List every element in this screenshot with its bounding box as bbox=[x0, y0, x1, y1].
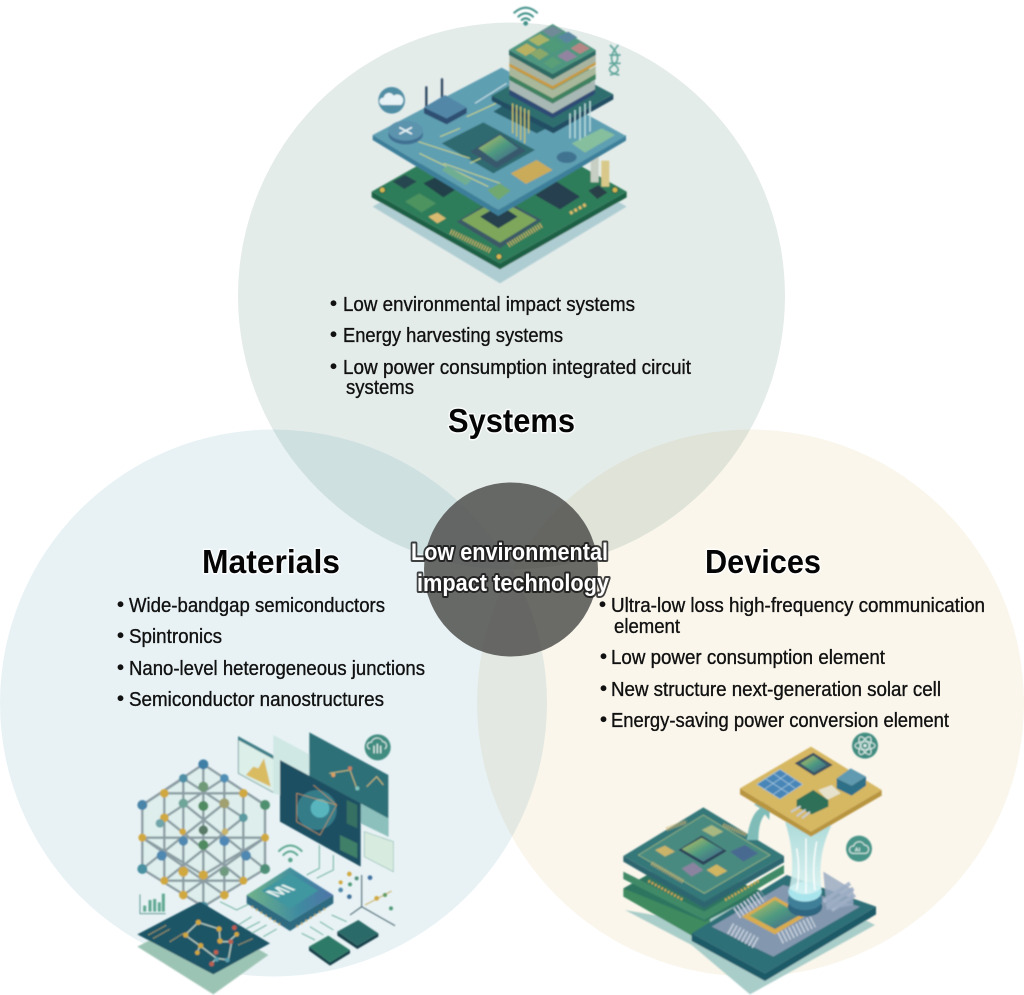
light column bbox=[785, 822, 832, 917]
bullet list: systems: Energy harvesting systems bbox=[343, 325, 563, 347]
heading: devices: Devices bbox=[705, 543, 821, 580]
bullet list: devices: • bbox=[600, 678, 607, 700]
bullet list: materials: • bbox=[117, 625, 124, 647]
bullet list: devices: Ultra-low loss high-frequency communication bbox=[611, 595, 985, 617]
bullet list: materials: Semiconductor nanostructures bbox=[129, 689, 384, 711]
scatter plot bbox=[338, 872, 395, 926]
chip stack bbox=[492, 24, 613, 143]
lattice nodes bbox=[137, 759, 270, 912]
center label: Low environmental bbox=[411, 539, 608, 566]
router bbox=[388, 79, 467, 144]
bullet list: systems: • bbox=[330, 356, 337, 378]
bullet list: systems: Low power consumption integrated circuit bbox=[343, 357, 691, 379]
circle: devices bbox=[477, 430, 1024, 976]
bullet list: systems: Low environmental impact systems bbox=[343, 294, 635, 316]
illustration: devices stacked chips and gold board bbox=[623, 733, 882, 994]
illustration: systems layered circuit boards bbox=[372, 8, 627, 283]
chip: MI bbox=[247, 867, 333, 931]
bullet list: devices: • bbox=[600, 709, 607, 731]
icon: AI cloud: AI bbox=[855, 847, 861, 853]
bullet list: materials: • bbox=[117, 594, 124, 616]
center label: impact technology bbox=[417, 570, 610, 597]
board shadow bbox=[373, 133, 627, 283]
curved arrow bbox=[747, 799, 770, 840]
green circuit board bbox=[372, 120, 627, 269]
glass plate bbox=[373, 68, 626, 216]
illustration: materials lattice and MI chip bbox=[137, 732, 395, 994]
base board with heat sink bbox=[692, 872, 876, 981]
bullet list: materials: Wide-bandgap semiconductors bbox=[129, 595, 385, 617]
bullet list: devices: Low power consumption element bbox=[611, 647, 885, 669]
bullet list: systems: • bbox=[330, 324, 337, 346]
bullet list: systems: • bbox=[330, 293, 337, 315]
bullet list: systems: systems bbox=[346, 377, 414, 399]
connector lines bbox=[220, 845, 347, 940]
bullet list: materials: Nano-level heterogeneous junctions bbox=[129, 658, 425, 680]
bullet list: devices: • bbox=[600, 646, 607, 668]
left layered boards bbox=[623, 807, 784, 936]
gold board bbox=[740, 747, 882, 837]
bullet list: materials bbox=[117, 594, 425, 711]
section: devices list bbox=[599, 543, 985, 732]
bullet list: devices: New structure next-generation solar cell bbox=[611, 679, 941, 701]
icon: cloud bbox=[378, 87, 405, 114]
icon: wifi bbox=[514, 8, 537, 25]
circle: systems bbox=[238, 22, 785, 570]
icon: dna bbox=[609, 45, 621, 75]
circle: materials bbox=[0, 430, 547, 976]
molecule board bbox=[137, 902, 270, 994]
capacitors bbox=[591, 157, 609, 187]
bullet list: materials: • bbox=[117, 688, 124, 710]
heading: systems: Systems bbox=[448, 402, 575, 439]
icon: cloud data bbox=[365, 734, 391, 760]
circle: center overlap bbox=[424, 482, 598, 656]
bullet list: materials: • bbox=[117, 657, 124, 679]
shadow bbox=[625, 885, 875, 994]
icon: atom bbox=[852, 733, 878, 759]
icon: bar chart bbox=[140, 894, 166, 914]
section: systems list bbox=[330, 293, 691, 439]
icon: wifi bbox=[279, 845, 302, 861]
bullet list: materials: Spintronics bbox=[129, 626, 222, 648]
small chips bbox=[309, 920, 378, 966]
lattice edges bbox=[142, 764, 265, 907]
section: materials list bbox=[117, 543, 425, 711]
bullet list: devices: element bbox=[614, 616, 680, 638]
chip: MI: MI bbox=[261, 882, 301, 900]
bullet list: devices: Energy-saving power conversion element bbox=[611, 710, 949, 732]
bullet list: systems bbox=[330, 293, 691, 399]
bullet list: devices: • bbox=[599, 594, 606, 616]
heading: materials: Materials bbox=[202, 543, 340, 580]
center label bbox=[411, 539, 610, 597]
icon: AI cloud bbox=[846, 836, 872, 862]
bullet list: devices bbox=[599, 594, 985, 732]
data panels bbox=[238, 732, 393, 872]
